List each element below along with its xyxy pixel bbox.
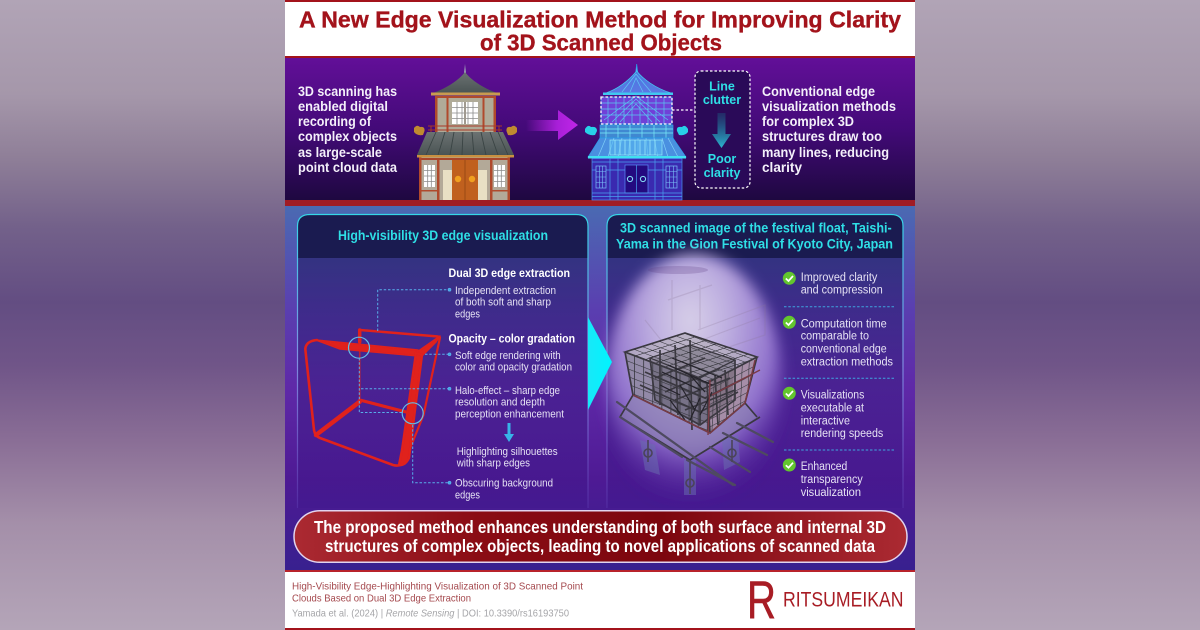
title: of 3D Scanned Objects bbox=[480, 30, 722, 56]
title bbox=[285, 0, 915, 56]
item: enhanced transparency: transparency bbox=[801, 474, 863, 486]
logo: Ritsumeikan bbox=[747, 571, 904, 630]
text: silhouettes and obscured edges: Obscuring background bbox=[455, 478, 553, 490]
text: opacity color gradation: Opacity – color gradation bbox=[448, 333, 575, 345]
text: paper reference bbox=[292, 580, 583, 620]
item: computation time: conventional edge bbox=[801, 343, 887, 355]
icon: traditional building bbox=[414, 64, 517, 200]
item: improved clarity: Improved clarity bbox=[801, 272, 878, 284]
heading: right panel: Yama in the Gion Festival of Kyoto City, Japan bbox=[616, 236, 893, 252]
arrow: down to silhouettes bbox=[504, 423, 514, 442]
arrow: building to wireframe bbox=[526, 110, 578, 140]
text: silhouettes and obscured edges: with sharp edges bbox=[456, 458, 530, 470]
callout box: line clutter to poor clarity: Poor bbox=[708, 152, 736, 166]
text: dual 3D edge extraction: edges bbox=[455, 308, 480, 320]
icon: wireframe building bbox=[585, 64, 688, 200]
item: improved clarity bbox=[783, 272, 883, 297]
text: 3D scanning intro bbox=[298, 83, 397, 175]
callout box: line clutter to poor clarity: clutter bbox=[703, 93, 741, 107]
callout: conclusion: structures of complex objects, leading to novel applications of scanned data bbox=[325, 536, 875, 556]
text: dual 3D edge extraction bbox=[448, 268, 570, 320]
logo: Ritsumeikan: R bbox=[747, 571, 776, 630]
panel: main section background bbox=[285, 206, 915, 570]
logo: Ritsumeikan: RITSUMEIKAN bbox=[783, 588, 904, 612]
text: conventional methods: visualization methods bbox=[762, 98, 896, 114]
arrow: cyan triangle between panels bbox=[588, 317, 612, 410]
list: benefits bbox=[783, 272, 894, 499]
callout box: line clutter to poor clarity: clarity bbox=[704, 166, 740, 180]
text: dual 3D edge extraction: Dual 3D edge extraction bbox=[448, 268, 570, 280]
text: conventional methods bbox=[762, 83, 896, 175]
connector lines to the cube bbox=[359, 288, 451, 484]
callout: conclusion: The proposed method enhances understanding of both surface and internal 3D bbox=[314, 517, 886, 537]
panel: introduction band bbox=[285, 56, 915, 206]
text: 3D scanning intro: complex objects bbox=[298, 128, 397, 144]
text: opacity color gradation: color and opacity gradation bbox=[455, 362, 572, 374]
text: opacity color gradation: Halo-effect – sharp edge bbox=[455, 385, 560, 397]
panel: high-visibility 3D edge visualization bbox=[298, 214, 588, 508]
title: A New Edge Visualization Method for Improving Clarity bbox=[299, 6, 901, 32]
text: 3D scanning intro: 3D scanning has bbox=[298, 83, 397, 99]
text: dual 3D edge extraction: of both soft and sharp bbox=[455, 297, 551, 309]
panel: 3D scanned image of festival float bbox=[606, 214, 903, 510]
item: enhanced transparency: visualization bbox=[801, 487, 861, 499]
item: computation time: comparable to bbox=[801, 331, 869, 343]
text: conventional methods: for complex 3D bbox=[762, 113, 854, 129]
heading: left panel: High-visibility 3D edge visualization bbox=[338, 227, 548, 243]
text: conventional methods: structures draw too bbox=[762, 128, 882, 144]
text: silhouettes and obscured edges: Highlighting silhouettes bbox=[457, 446, 558, 458]
item: computation time bbox=[783, 316, 893, 369]
item: improved clarity: and compression bbox=[801, 285, 883, 297]
callout: conclusion bbox=[294, 511, 907, 562]
text: conventional methods: Conventional edge bbox=[762, 83, 875, 99]
item: interactive speeds: executable at bbox=[801, 402, 865, 414]
text: conventional methods: many lines, reducing bbox=[762, 144, 889, 160]
text: opacity color gradation: perception enhancement bbox=[455, 408, 564, 420]
text: paper reference: Clouds Based on Dual 3D Edge Extraction bbox=[292, 592, 471, 604]
text: opacity color gradation: Soft edge rendering with bbox=[455, 350, 561, 362]
callout box: line clutter to poor clarity bbox=[601, 71, 750, 188]
text: 3D scanning intro: recording of bbox=[298, 113, 371, 129]
text: conventional methods: clarity bbox=[762, 159, 802, 175]
text: paper reference: High-Visibility Edge-Highlighting Visualization of 3D Scanned Point bbox=[292, 580, 583, 592]
zoom circles on the cube bbox=[348, 337, 423, 424]
item: interactive speeds: interactive bbox=[801, 415, 850, 427]
panel: infographic card bbox=[285, 0, 915, 630]
item: computation time: extraction methods bbox=[801, 357, 893, 369]
text: 3D scanning intro: point cloud data bbox=[298, 159, 397, 175]
text: 3D scanning intro: as large-scale bbox=[298, 144, 382, 160]
item: interactive speeds: Visualizations bbox=[801, 390, 865, 402]
chart: red edge cube bbox=[305, 330, 440, 466]
footer bbox=[285, 570, 915, 630]
item: enhanced transparency bbox=[783, 458, 863, 499]
item: computation time: Computation time bbox=[801, 318, 887, 330]
text: silhouettes and obscured edges: edges bbox=[455, 489, 480, 501]
text: opacity color gradation bbox=[448, 333, 575, 420]
text: paper reference: Yamada et al. (2024) | Remote Sensing | DOI: 10.3390/rs16193750 bbox=[292, 608, 569, 620]
text: silhouettes and obscured edges bbox=[455, 446, 558, 501]
text: opacity color gradation: resolution and depth bbox=[455, 397, 545, 409]
text: 3D scanning intro: enabled digital bbox=[298, 98, 388, 114]
item: interactive speeds bbox=[783, 387, 884, 440]
heading: right panel: 3D scanned image of the festival float, Taishi- bbox=[620, 220, 892, 236]
item: enhanced transparency: Enhanced bbox=[801, 461, 847, 473]
callout box: line clutter to poor clarity: Line bbox=[709, 80, 735, 94]
image: scanned festival float bbox=[606, 254, 782, 510]
heading: right panel bbox=[616, 220, 893, 252]
text: dual 3D edge extraction: Independent extraction bbox=[455, 285, 556, 297]
item: interactive speeds: rendering speeds bbox=[801, 428, 884, 440]
